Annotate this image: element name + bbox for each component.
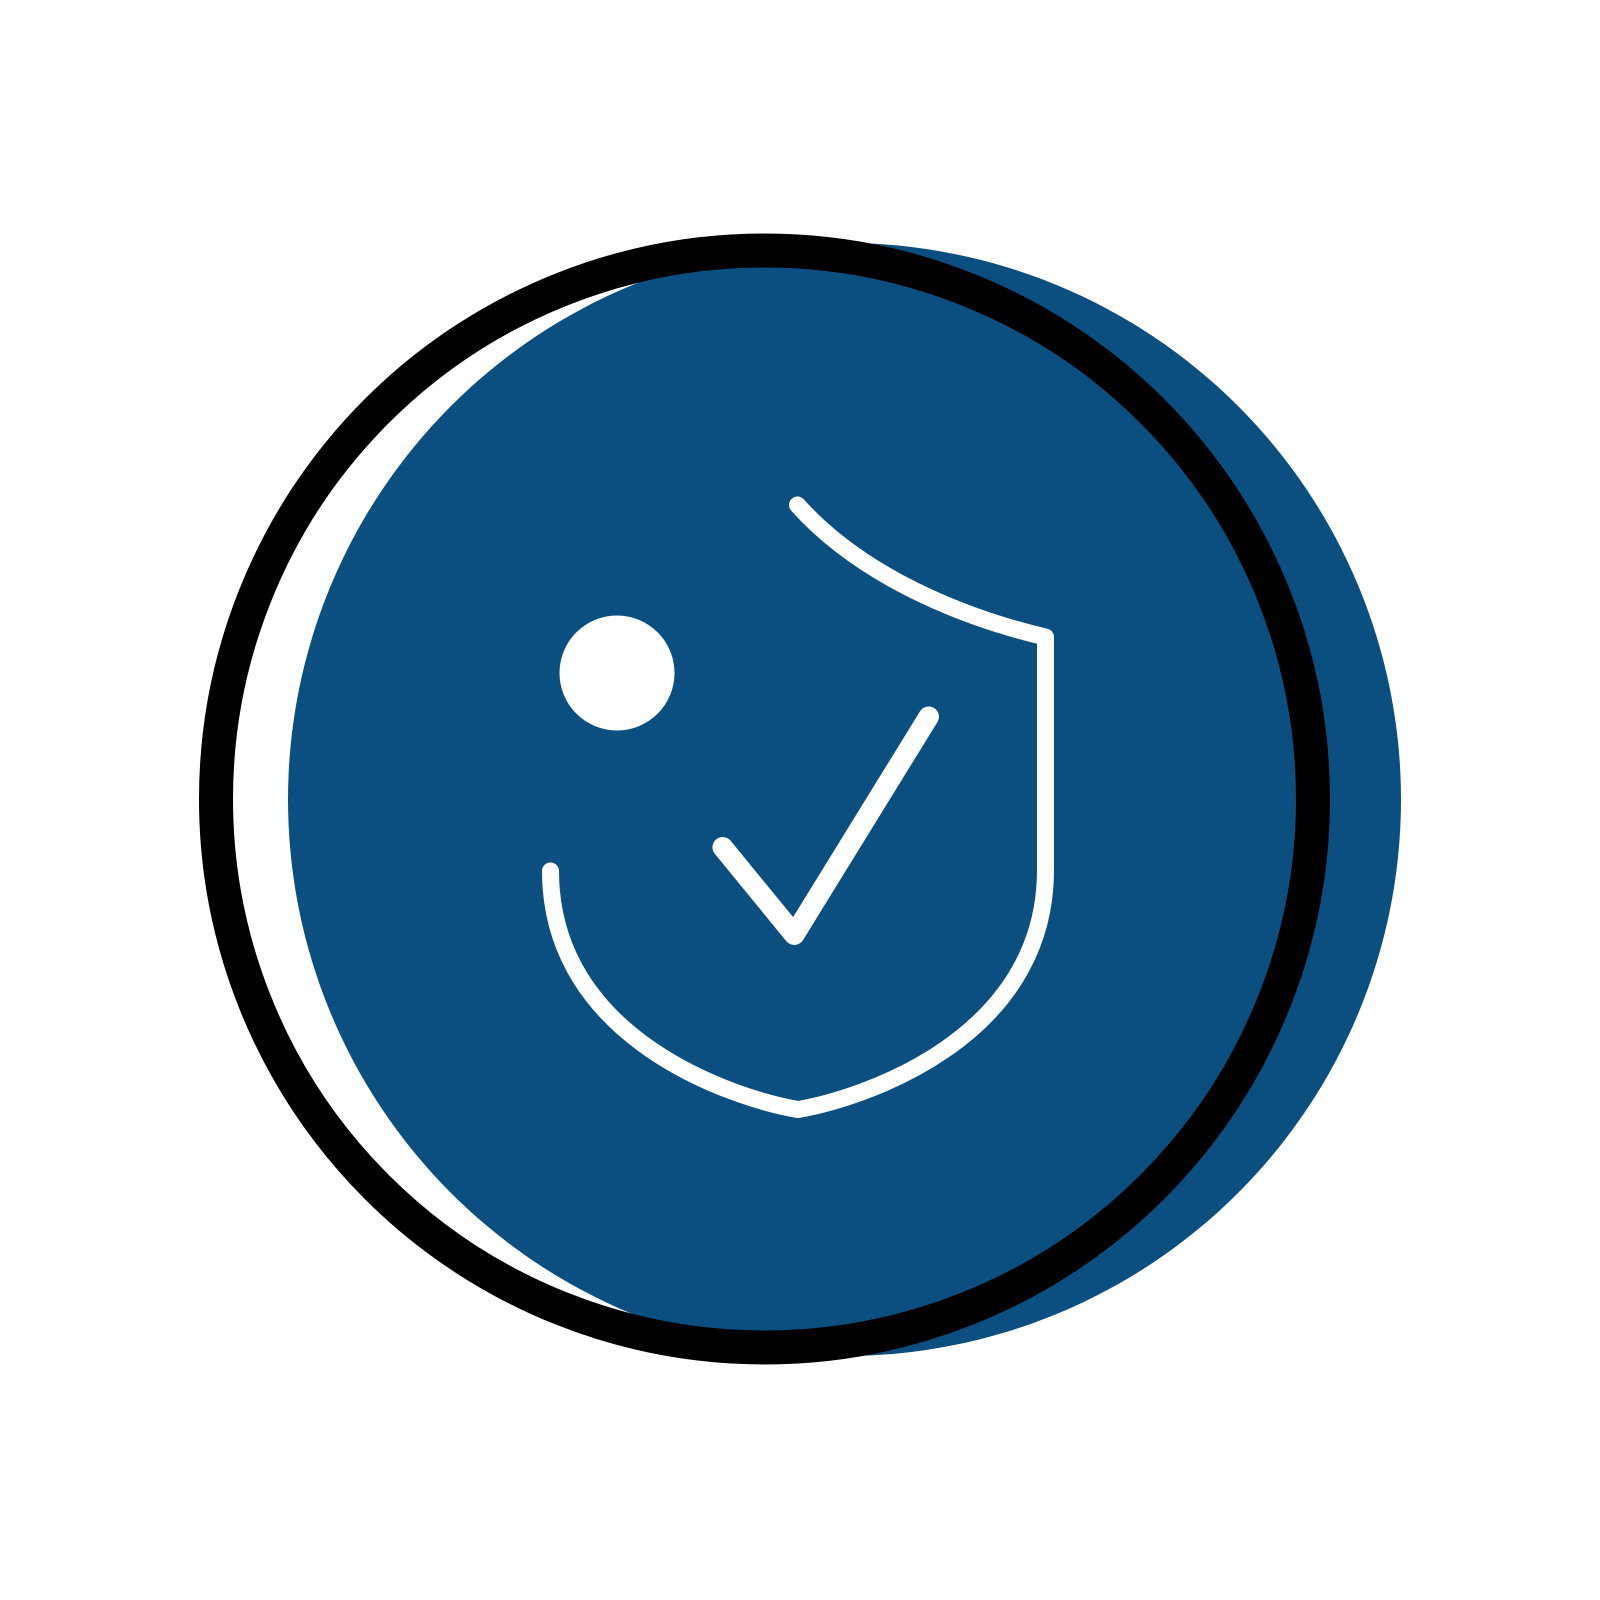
black circle outline [216, 250, 1313, 1348]
white dot [560, 616, 674, 730]
check mark [723, 717, 929, 935]
shield outline [550, 505, 1046, 1110]
blue offset circle [288, 243, 1401, 1356]
